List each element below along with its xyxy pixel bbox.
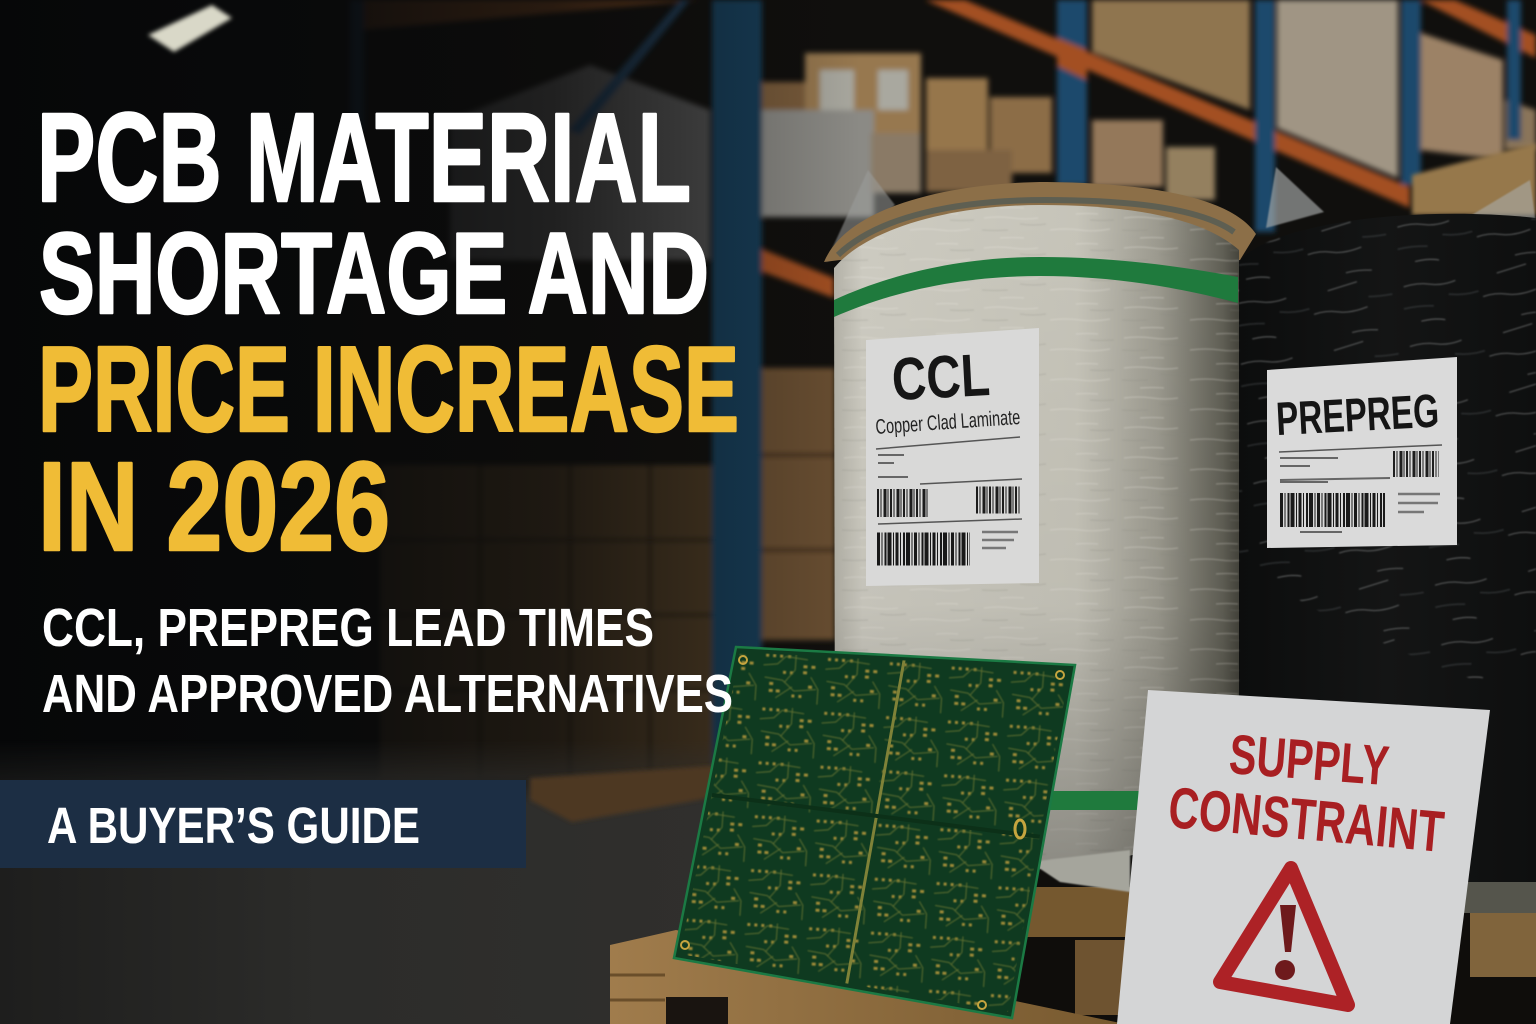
label: ccl: CCL [890, 341, 992, 413]
subtitle: AND APPROVED ALTERNATIVES [42, 664, 733, 724]
label: ccl [866, 328, 1039, 586]
title: IN 2026 [38, 436, 390, 577]
circuit board [660, 640, 1090, 1024]
sign: supply constraint [1117, 690, 1490, 1024]
box behind the black roll [1412, 143, 1536, 215]
badge: a buyer's guide [0, 780, 526, 868]
label: prepreg [1267, 357, 1457, 548]
label: prepreg: PREPREG [1275, 384, 1440, 445]
green band [834, 257, 1238, 317]
title [37, 87, 739, 577]
shelf boxes and racks [350, 0, 1536, 790]
label: ccl: Copper Clad Laminate [875, 406, 1021, 439]
icon: warning triangle [1220, 868, 1348, 1005]
subtitle [42, 598, 733, 724]
black prepreg roll [1239, 167, 1536, 882]
badge: a buyer's guide: A BUYER’S GUIDE [47, 797, 420, 854]
warehouse floor [0, 740, 720, 1024]
wooden pallet [610, 880, 1536, 1024]
sign: supply constraint: SUPPLY [1227, 722, 1391, 797]
title: PRICE INCREASE [38, 321, 739, 457]
white ccl roll [824, 170, 1256, 892]
ceiling light [148, 5, 232, 52]
title: PCB MATERIAL [37, 87, 691, 228]
floor pallet [530, 765, 728, 822]
title: SHORTAGE AND [39, 210, 709, 338]
subtitle: CCL, PREPREG LEAD TIMES [42, 598, 654, 658]
